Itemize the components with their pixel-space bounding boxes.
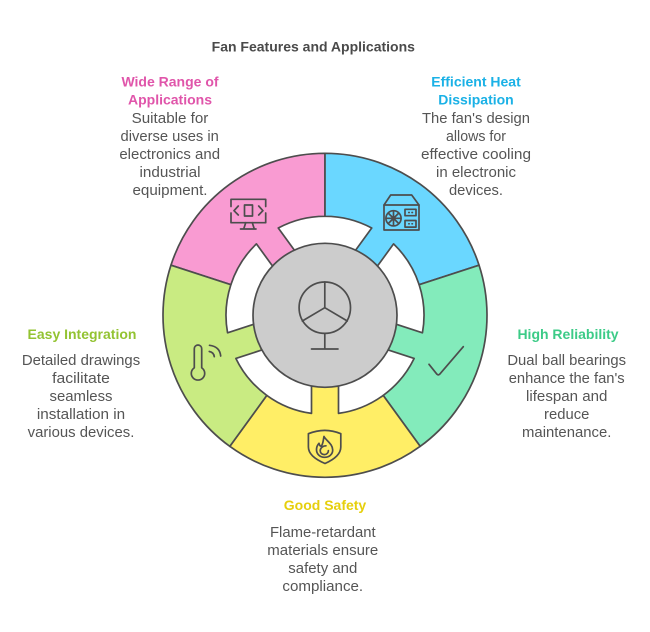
description: easy integration: various devices.	[28, 424, 134, 441]
description: wide range of applications: diverse uses in	[121, 128, 219, 145]
text: high reliability	[507, 326, 626, 441]
description: high reliability: reduce	[544, 406, 589, 423]
description: easy integration: Detailed drawings	[22, 352, 140, 369]
description: wide range of applications: electronics and	[119, 146, 220, 163]
description: good safety: materials ensure	[267, 542, 378, 559]
center hub	[253, 243, 397, 387]
segment: efficient heat dissipation	[290, 128, 497, 314]
description: efficient heat dissipation: The fan's design	[422, 110, 530, 127]
segment: wide range of applications	[153, 128, 360, 314]
icon: monitor with code	[231, 199, 266, 229]
description: efficient heat dissipation: in electronic	[436, 164, 516, 181]
segment: high reliability	[363, 247, 508, 456]
description: good safety: compliance.	[282, 578, 363, 595]
radial diagram	[142, 128, 508, 477]
segment: good safety	[230, 386, 420, 477]
title: Fan Features and Applications	[212, 38, 415, 54]
icon: checkmark	[429, 347, 463, 375]
icon: power supply unit	[384, 195, 419, 230]
description: easy integration: facilitate	[52, 370, 110, 387]
description: wide range of applications: equipment.	[132, 182, 208, 199]
description: high reliability: lifespan and	[526, 388, 607, 405]
heading: good safety: Good Safety	[284, 497, 366, 513]
description: efficient heat dissipation	[421, 110, 531, 199]
heading: easy integration: Easy Integration	[28, 326, 136, 342]
description: good safety: Flame-retardant	[270, 524, 376, 541]
description: good safety	[267, 524, 378, 595]
description: high reliability: enhance the fan's	[509, 370, 625, 387]
description: wide range of applications: Suitable for	[132, 110, 208, 127]
text: wide range of applications	[119, 74, 220, 199]
heading: wide range of applications: Applications	[128, 92, 212, 108]
description: efficient heat dissipation: allows for	[446, 128, 506, 145]
description: easy integration	[22, 352, 140, 441]
description: efficient heat dissipation: devices.	[449, 182, 503, 199]
text: easy integration	[22, 326, 140, 441]
text: efficient heat dissipation	[421, 74, 531, 199]
heading: efficient heat dissipation: Efficient Heat	[431, 74, 521, 90]
text: good safety	[267, 497, 378, 595]
description: high reliability	[507, 352, 626, 441]
icon: thermometer	[191, 345, 221, 380]
segment: easy integration	[142, 247, 287, 456]
description: high reliability: maintenance.	[522, 424, 611, 441]
description: easy integration: seamless	[50, 388, 112, 405]
heading: wide range of applications: Wide Range of	[121, 74, 219, 90]
icon: shield with flame	[308, 430, 341, 464]
icon: fan	[299, 282, 350, 349]
description: good safety: safety and	[288, 560, 357, 577]
description: efficient heat dissipation: effective cooling	[421, 146, 531, 163]
description: easy integration: installation in	[37, 406, 125, 423]
description: high reliability: Dual ball bearings	[507, 352, 626, 369]
heading: efficient heat dissipation: Dissipation	[438, 92, 514, 108]
heading: high reliability: High Reliability	[517, 326, 619, 342]
description: wide range of applications	[119, 110, 220, 199]
description: wide range of applications: industrial	[140, 164, 200, 181]
